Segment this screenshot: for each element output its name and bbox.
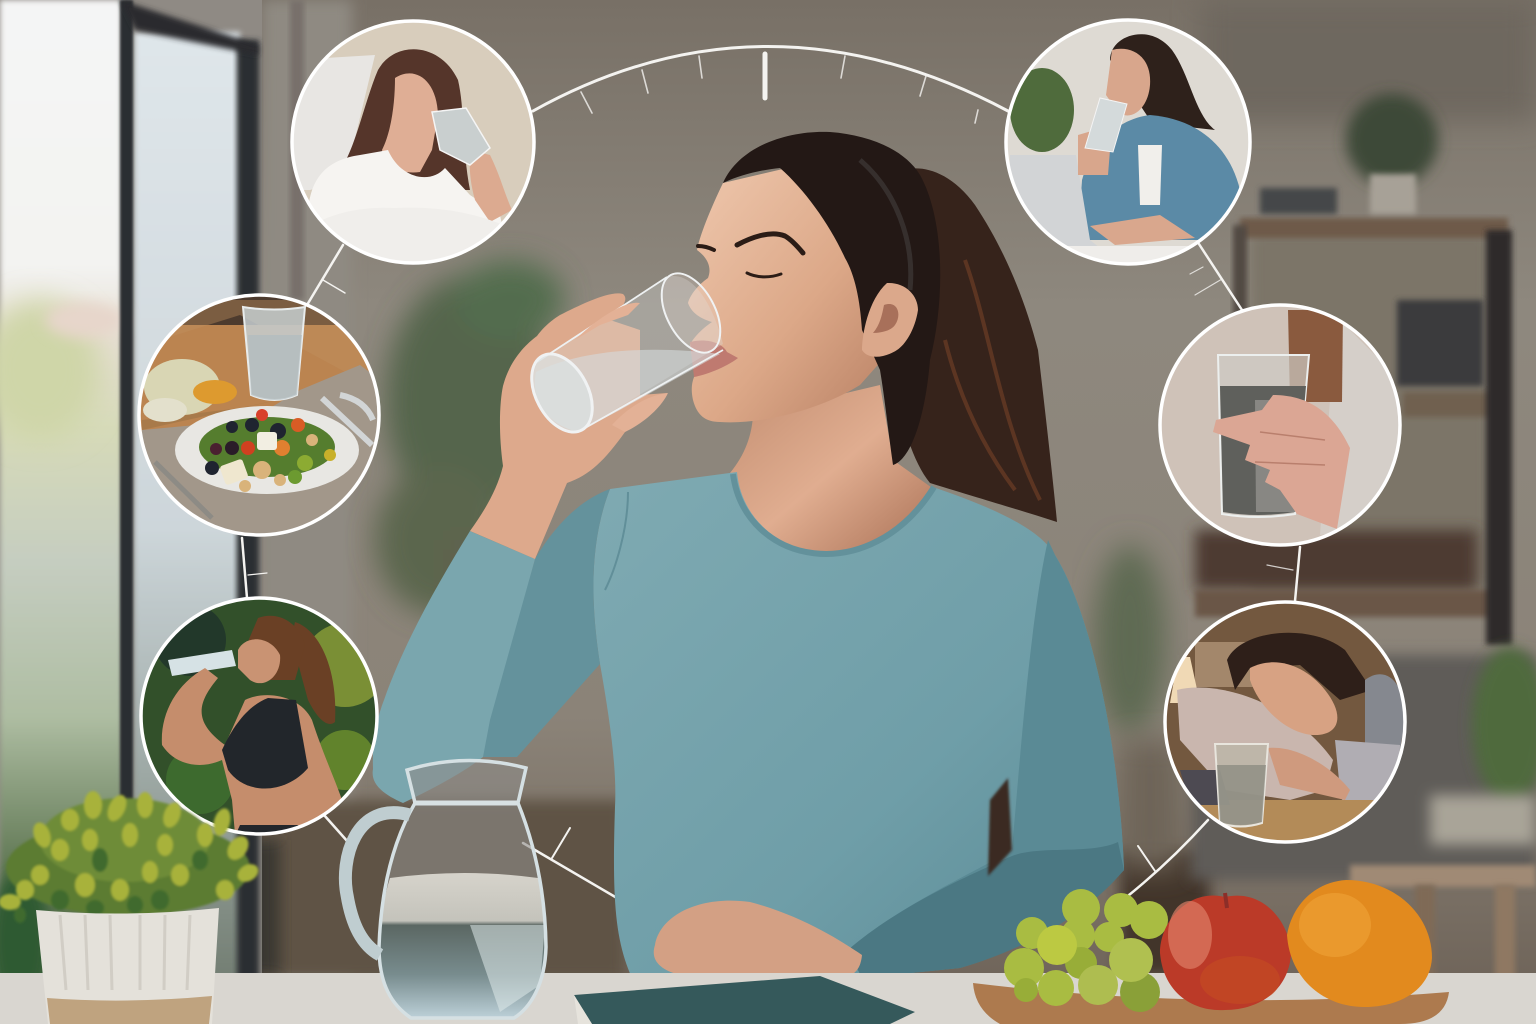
right forearm [848,842,1124,978]
hand holding glass [470,293,667,559]
vignette border: working [1006,20,1250,264]
lips [690,340,738,377]
glass water pitcher [345,760,546,1018]
orange [1287,880,1432,1007]
window with frame [0,0,262,1024]
ponytail [891,168,1057,522]
vignette border: waking up [292,21,534,263]
forearm sleeve left [373,531,535,803]
ear [862,283,918,357]
vignette border: holding glass [1160,305,1400,545]
vignette: bedtime water [1165,602,1405,842]
upper arm left [483,489,610,757]
vignette: waking up in bed [292,21,534,263]
foliage [0,791,262,923]
vignette border: bedtime [1165,602,1405,842]
notebook [574,976,915,1024]
shirt torso [593,472,1124,978]
right arm [848,540,1124,978]
ponytail highlights [945,260,1040,500]
shoulder seam [605,492,628,590]
vignette border: workout [141,598,377,834]
blurred plant behind the woman [375,260,565,700]
fingers over glass [575,303,668,432]
vignette border: meal [139,295,379,535]
hair shine [860,160,911,290]
grapes [1004,889,1168,1012]
hair [723,132,940,465]
vignette: working at a laptop [1006,20,1250,264]
table [0,973,1536,1024]
connecting timeline arc with ticks [242,46,1300,898]
eye and brow [698,234,803,277]
vignette: meal with water [139,295,380,535]
gap with hair [988,778,1012,876]
collar band [733,474,934,554]
vignette: holding a glass [1160,305,1400,545]
vignette: post-workout drink [141,598,387,834]
fruit bowl [973,880,1449,1024]
apple [1160,895,1291,1010]
main woman drinking water [373,132,1124,985]
pot [36,908,219,1024]
blurred shelves and decor on the right [1094,94,1536,980]
neck [730,385,935,558]
lower hand [654,901,862,985]
glass of water [519,264,732,442]
face [688,165,900,422]
potted plant [0,791,262,1024]
